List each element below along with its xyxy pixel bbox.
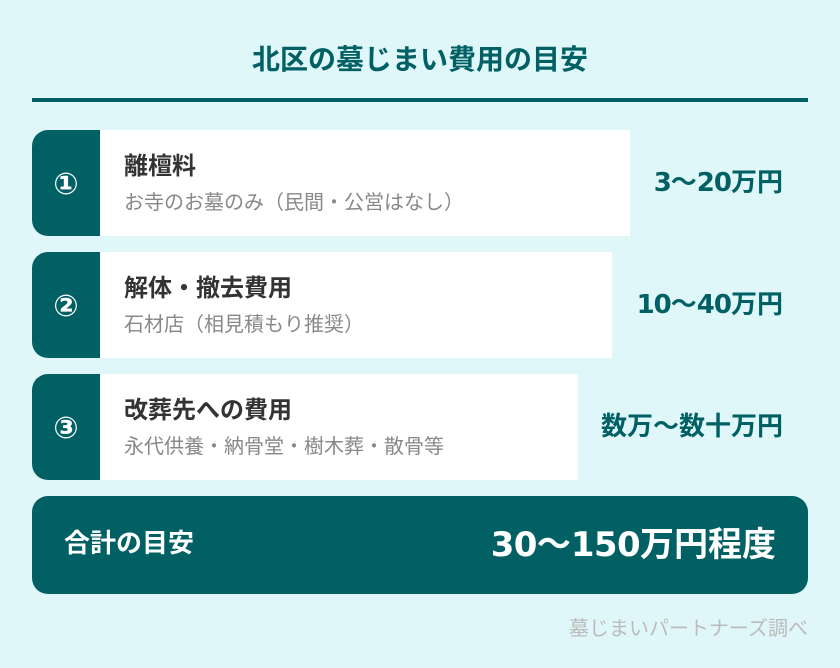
badge 3: ③ (53, 411, 79, 446)
badge 1 (32, 130, 100, 236)
row 2: 解体・撤去費用 (32, 252, 783, 358)
row 1: 離檀料 (32, 130, 783, 236)
price 1: 3〜20万円 (654, 168, 783, 198)
card 1 description: お寺のお墓のみ（民間・公営はなし） (124, 190, 464, 214)
card 3 description: 永代供養・納骨堂・樹木葬・散骨等 (124, 434, 444, 458)
title: 北区の墓じまい費用の目安 (252, 43, 588, 76)
price 3: 数万〜数十万円 (601, 412, 783, 442)
title rule (32, 98, 808, 102)
card 1 (100, 130, 630, 236)
card 1 heading: 離檀料 (124, 152, 196, 180)
card 2 description: 石材店（相見積もり推奨） (124, 312, 364, 336)
badge 2: ② (53, 289, 79, 324)
source note: 墓じまいパートナーズ調べ (569, 616, 808, 640)
total amount: 30〜150万円程度 (491, 525, 776, 565)
badge 1: ① (53, 167, 79, 202)
row 3: 改葬先への費用 (32, 374, 783, 480)
badge 2 (32, 252, 100, 358)
card 3 (100, 374, 578, 480)
total label: 合計の目安 (64, 529, 194, 559)
card 2 (100, 252, 612, 358)
badge 3 (32, 374, 100, 480)
card 2 heading: 解体・撤去費用 (124, 274, 292, 302)
card 3 heading: 改葬先への費用 (124, 396, 292, 424)
price 2: 10〜40万円 (637, 290, 783, 320)
total panel (32, 496, 808, 594)
